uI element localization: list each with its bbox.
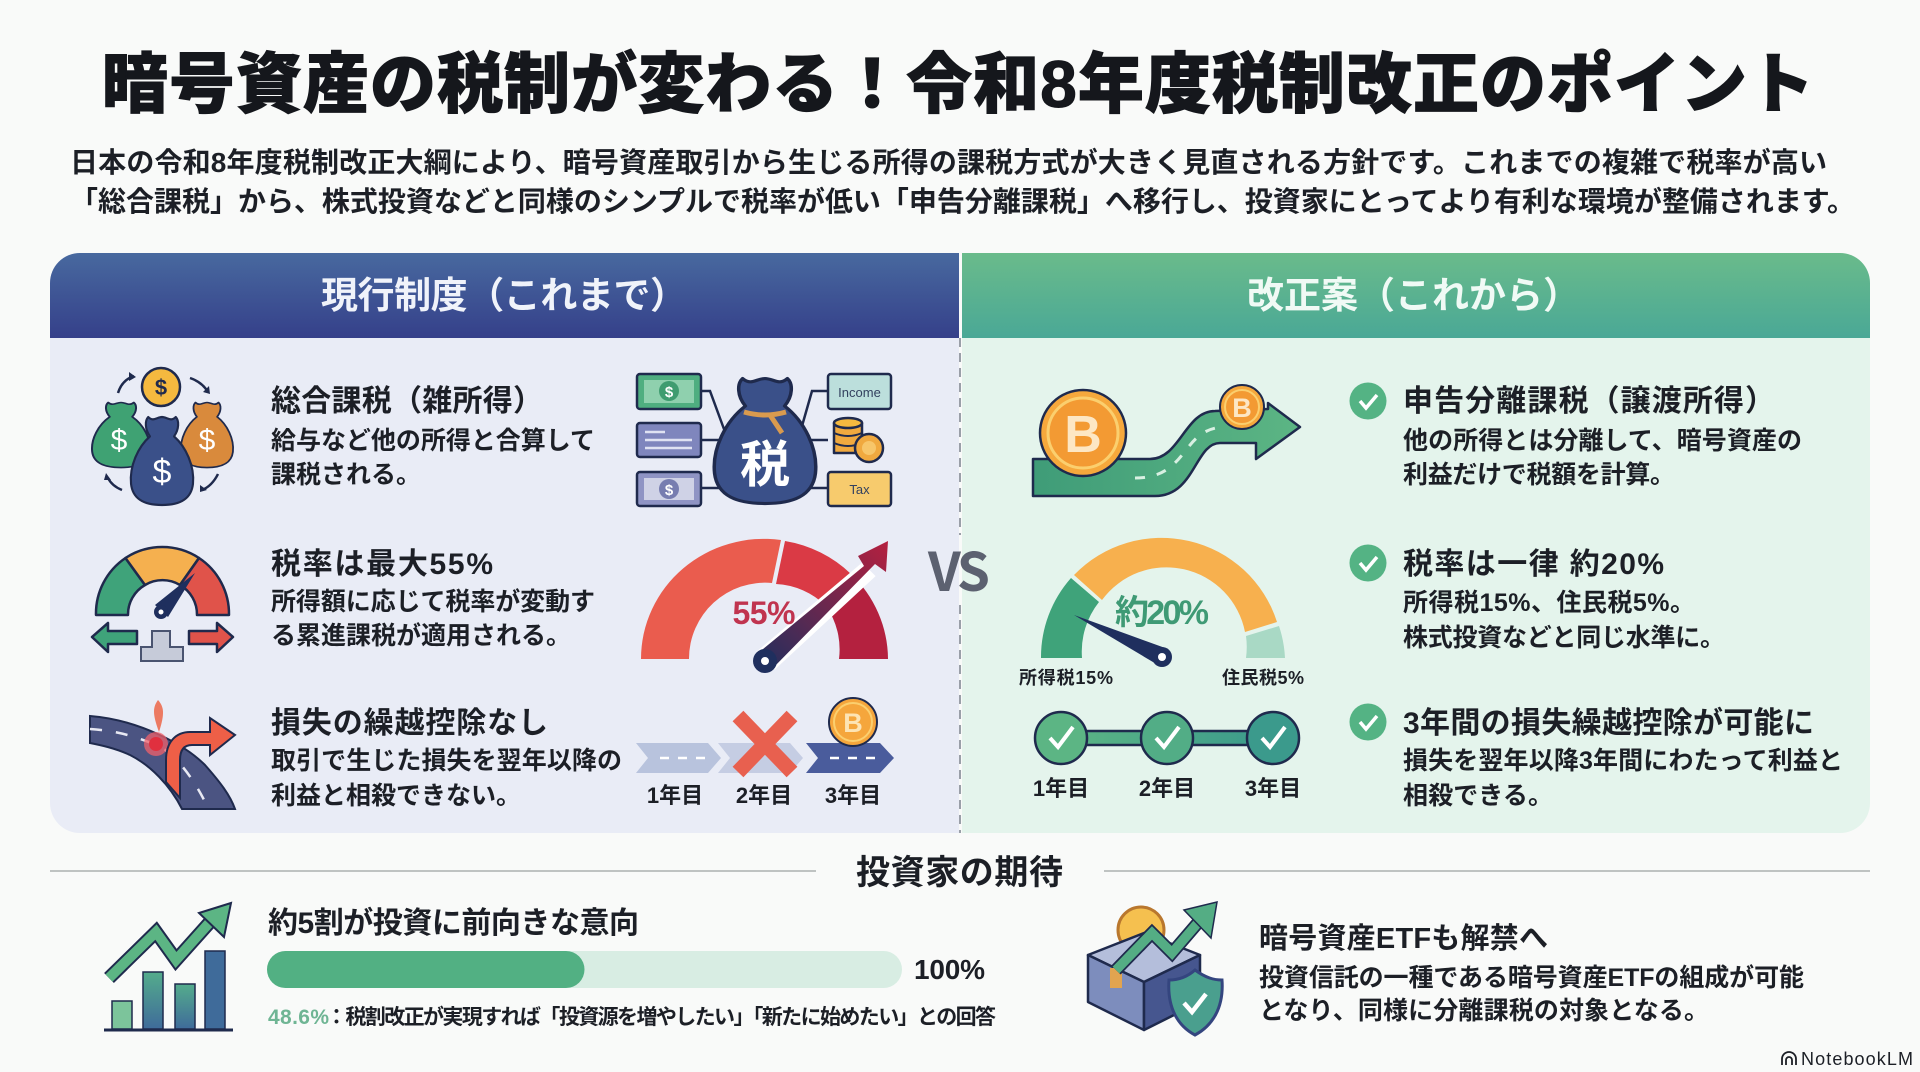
chart: 55% gauge: 55% bbox=[732, 595, 796, 631]
progress bar: 48.6% bbox=[267, 951, 985, 988]
logo: NotebookLM: NotebookLM bbox=[1801, 1049, 1913, 1069]
intro text: 「総合課税」から、株式投資などと同様のシンプルで税率が低い「申告分離課税」へ移行し、投資家にとってより有利な環境が整備されます。 bbox=[70, 185, 1855, 217]
check and text: flat tax rate: 税率は一律 約20% bbox=[1403, 548, 1664, 581]
text: no loss carryforward bbox=[271, 707, 622, 810]
chart: 20% gauge: 約20% bbox=[1115, 594, 1209, 632]
chart: three year steps bbox=[1033, 712, 1301, 801]
text: aggregate taxation: 給与など他の所得と合算して bbox=[271, 427, 595, 455]
chart: timeline no carryforward: 3年目 bbox=[825, 783, 881, 808]
text: aggregate taxation: 課税される。 bbox=[271, 461, 421, 489]
text: tax rate up to 55%: る累進課税が適用される。 bbox=[271, 621, 571, 650]
text: no loss carryforward: 損失の繰越控除なし bbox=[271, 707, 548, 740]
check and text: separate taxation: 他の所得とは分離して、暗号資産の bbox=[1403, 427, 1802, 455]
chart: three year steps: 1年目 bbox=[1033, 776, 1089, 801]
intro text bbox=[70, 146, 1855, 217]
panel: proposed reform bbox=[962, 253, 1870, 833]
panel: current system bbox=[50, 253, 959, 833]
check and text: separate taxation: 利益だけで税額を計算。 bbox=[1403, 461, 1675, 489]
text: aggregate taxation: 総合課税（雑所得） bbox=[271, 385, 543, 418]
note: survey response: ：税割改正が実現すれば「投資源を増やしたい」「新たに始めたい」との回答 bbox=[326, 1005, 996, 1029]
icon: money bags: $ bbox=[199, 424, 216, 457]
icon: money bags bbox=[92, 368, 233, 505]
note: survey response: 48.6% bbox=[268, 1006, 329, 1029]
header: current system bbox=[50, 253, 959, 338]
icon: tax bag with income sources: Income bbox=[838, 385, 881, 400]
header: current system: 現行制度（これまで） bbox=[321, 275, 687, 316]
VS label: VS bbox=[927, 531, 990, 607]
intro text: 日本の令和8年度税制改正大綱により、暗号資産取引から生じる所得の課税方式が大きく見直される方針です。これまでの複雑で税率が高い bbox=[70, 146, 1827, 178]
chart: 20% gauge: 住民税5% bbox=[1222, 668, 1304, 688]
text: crypto ETF: 投資信託の一種である暗号資産ETFの組成が可能 bbox=[1259, 963, 1804, 992]
icon: small gauge with arrows bbox=[92, 547, 233, 661]
check and text: three year loss carryforward bbox=[1350, 704, 1843, 810]
icon: rising bar chart bbox=[104, 903, 233, 1030]
check and text: three year loss carryforward: 3年間の損失繰越控除が可能に bbox=[1403, 706, 1814, 740]
chart: timeline no carryforward bbox=[636, 698, 894, 808]
icon: ETF box with shield bbox=[1088, 902, 1222, 1035]
text: aggregate taxation bbox=[271, 385, 595, 489]
icon: tax bag with income sources bbox=[637, 374, 891, 506]
check and text: separate taxation bbox=[1350, 382, 1802, 489]
text: no loss carryforward: 利益と相殺できない。 bbox=[271, 782, 521, 810]
check and text: separate taxation: 申告分離課税（譲渡所得） bbox=[1403, 385, 1775, 418]
check and text: three year loss carryforward: 損失を翌年以降3年間にわたって利益と bbox=[1403, 747, 1843, 775]
check and text: three year loss carryforward: 相殺できる。 bbox=[1403, 782, 1553, 810]
chart: timeline no carryforward: 1年目 bbox=[647, 783, 703, 808]
icon: money bags: $ bbox=[153, 453, 172, 491]
text: tax rate up to 55%: 所得額に応じて税率が変動す bbox=[271, 587, 595, 616]
icon: bitcoin on rising road: B bbox=[1064, 406, 1102, 464]
icon: tax bag with income sources: 税 bbox=[740, 437, 790, 493]
section heading: investor expectations: 投資家の期待 bbox=[856, 854, 1063, 892]
check and text: flat tax rate: 所得税15%、住民税5%。 bbox=[1403, 589, 1695, 617]
chart: timeline no carryforward: B bbox=[843, 708, 863, 738]
icon: bitcoin on rising road bbox=[1033, 385, 1300, 496]
icon: tax bag with income sources: $ bbox=[665, 482, 674, 499]
check and text: flat tax rate: 株式投資などと同じ水準に。 bbox=[1403, 624, 1725, 652]
title: 暗号資産の税制が変わる！令和8年度税制改正のポイント bbox=[102, 47, 1814, 121]
header: proposed reform bbox=[962, 253, 1870, 338]
icon: tax bag with income sources: Tax bbox=[849, 482, 870, 497]
text: tax rate up to 55%: 税率は最大55% bbox=[271, 548, 493, 581]
text: crypto ETF: となり、同様に分離課税の対象となる。 bbox=[1259, 997, 1709, 1025]
chart: timeline no carryforward: 2年目 bbox=[736, 783, 792, 808]
text: no loss carryforward: 取引で生じた損失を翌年以降の bbox=[271, 747, 622, 775]
chart: three year steps: 2年目 bbox=[1139, 776, 1195, 801]
icon: bitcoin on rising road: B bbox=[1232, 393, 1252, 423]
text: tax rate up to 55% bbox=[271, 548, 595, 650]
text: crypto ETF bbox=[1259, 922, 1804, 1025]
icon: money bags: $ bbox=[111, 424, 128, 457]
chart: 20% gauge bbox=[1019, 538, 1304, 688]
icon: tax bag with income sources: $ bbox=[665, 384, 674, 401]
chart: three year steps: 3年目 bbox=[1245, 776, 1301, 801]
chart: 20% gauge: 所得税15% bbox=[1019, 668, 1113, 688]
chart: 55% gauge bbox=[641, 539, 888, 673]
progress bar: 48.6%: 100% bbox=[914, 954, 985, 985]
text: crypto ETF: 暗号資産ETFも解禁へ bbox=[1259, 922, 1548, 955]
header: proposed reform: 改正案（これから） bbox=[1247, 275, 1580, 316]
icon: road fork bbox=[90, 700, 235, 809]
check and text: flat tax rate bbox=[1350, 544, 1725, 652]
text: around half positive: 約5割が投資に前向きな意向 bbox=[268, 906, 639, 940]
icon: money bags: $ bbox=[155, 375, 167, 400]
